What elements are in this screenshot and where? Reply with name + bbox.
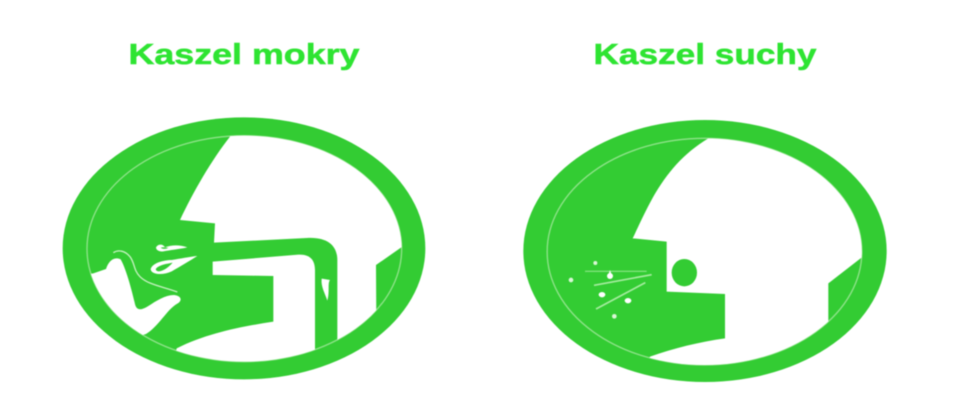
opening inside the tube bbox=[176, 254, 316, 362]
droplet in the tube bbox=[322, 279, 330, 301]
head silhouette bbox=[90, 135, 402, 362]
thin inner outline bbox=[87, 136, 402, 362]
upper mucus splash bbox=[156, 245, 187, 251]
heading: wet cough: Kaszel mokry bbox=[128, 39, 360, 71]
head silhouette bbox=[632, 138, 862, 366]
mouth bbox=[672, 259, 697, 286]
hand bbox=[90, 258, 182, 336]
icon ring bbox=[63, 117, 425, 379]
dry cough particles and lines bbox=[569, 261, 652, 319]
icon ring bbox=[523, 120, 887, 382]
thin mucus stream bbox=[113, 251, 177, 292]
lower mucus splash bbox=[151, 256, 197, 274]
icon: wet cough bbox=[63, 117, 425, 379]
icon: dry cough bbox=[523, 120, 887, 382]
thin inner outline bbox=[547, 138, 862, 365]
heading: dry cough: Kaszel suchy bbox=[594, 39, 816, 71]
